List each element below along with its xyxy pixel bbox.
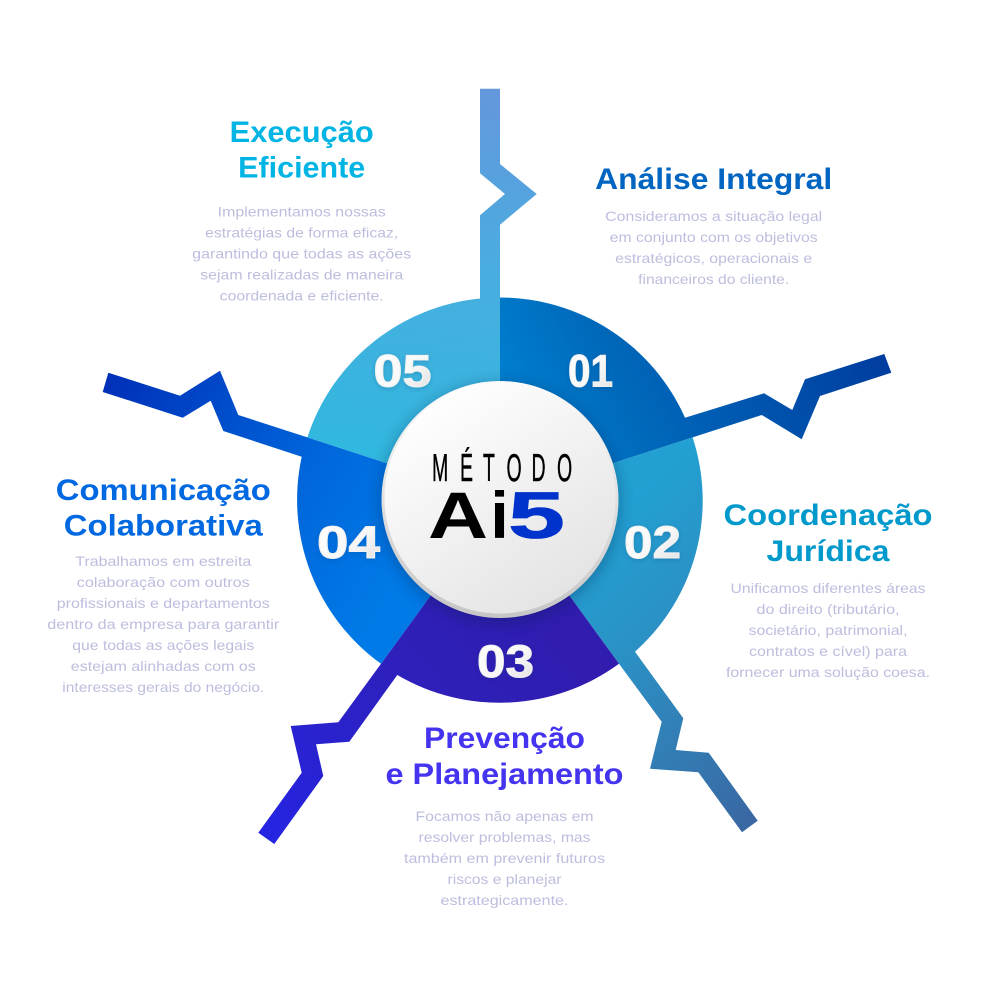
body text 04: Trabalhamos em estreita [75,553,252,569]
number 03: 03 [477,636,534,687]
body text 05 [192,204,411,304]
body text 03: estrategicamente. [440,892,568,908]
body text 01 [605,208,822,287]
center disc shadow [379,382,621,624]
heading: Execução Eficiente [230,116,374,184]
body text 04 [47,553,280,695]
sector 01 with arm [500,298,891,500]
heading: Coordenação Jurídica: Coordenação [724,499,932,532]
sector numbers [317,346,681,687]
body text 02: contratos e cível) para [749,643,907,659]
heading: Prevenção e Planejamento: e Planejamento [386,758,624,791]
body text 04: interesses gerais do negócio. [62,679,264,695]
heading: Comunicação Colaborativa: Colaborativa [64,510,263,542]
body text 02 [726,580,930,680]
body text 04: estejam alinhadas com os [71,658,256,674]
heading: Comunicação Colaborativa [56,474,271,542]
body text 03: resolver problemas, mas [418,829,590,845]
center disc [382,381,618,618]
body text 05: estratégias de forma eficaz, [205,224,398,240]
body text 04: dentro da empresa para garantir [47,616,280,632]
number 01: 01 [568,346,613,396]
panel: 02 Coordenação Jurídica [724,499,932,680]
number 02: 02 [624,517,681,568]
body text 03: riscos e planejar [448,871,562,887]
logo: Método Ai5 [428,446,572,553]
body text 05: sejam realizadas de maneira [200,266,403,282]
body text 04: profissionais e departamentos [57,595,270,611]
body text 02: Unificamos diferentes áreas [730,580,926,596]
body text 04: colaboração com outros [77,574,250,590]
body text 03: também em prevenir futuros [404,850,605,866]
heading: Comunicação Colaborativa: Comunicação [56,474,271,507]
sector 02 with arm [500,437,758,832]
panel: 04 Comunicação Colaborativa [47,474,280,695]
radial wheel with lightning arms [103,89,891,844]
logo mark Ai5 [428,478,565,553]
logo mark Ai5: i [490,478,509,552]
body text 02: fornecer uma solução coesa. [726,664,930,680]
panel: 03 Prevenção e Planejamento [386,722,624,908]
heading: Coordenação Jurídica [724,499,932,568]
sector 05 with arm [307,89,537,500]
heading: Coordenação Jurídica: Jurídica [766,535,890,568]
body text 02: do direito (tributário, [756,601,900,617]
heading: Execução Eficiente: Execução [230,116,374,149]
heading: Prevenção e Planejamento: Prevenção [424,722,585,755]
number 04: 04 [317,517,380,568]
heading: Análise Integral: Análise Integral [595,163,832,196]
body text 05: coordenada e eficiente. [220,288,384,304]
sector 04 with arm [103,371,500,664]
logo word MÉTODO: MÉTODO [432,446,572,490]
heading: Execução Eficiente: Eficiente [238,152,365,184]
number 05: 05 [374,346,432,396]
body text 04: que todas as ações legais [72,637,254,653]
body text 03 [404,808,605,908]
panel: 05 Execução Eficiente [192,116,411,304]
body text 01: financeiros do cliente. [638,271,789,287]
logo mark Ai5: 5 [508,479,565,553]
body text 03: Focamos não apenas em [416,808,594,824]
panel: 01 Análise Integral [595,163,832,287]
body text 01: Consideramos a situação legal [605,208,822,224]
body text 01: estratégicos, operacionais e [615,250,812,266]
heading: Prevenção e Planejamento [386,722,624,791]
body text 02: societário, patrimonial, [748,622,908,638]
body text 01: em conjunto com os objetivos [610,229,818,245]
logo mark Ai5: A [428,478,488,552]
body text 05: Implementamos nossas [218,204,386,220]
sector 03 with arm [258,500,619,844]
body text 05: garantindo que todas as ações [192,246,411,262]
